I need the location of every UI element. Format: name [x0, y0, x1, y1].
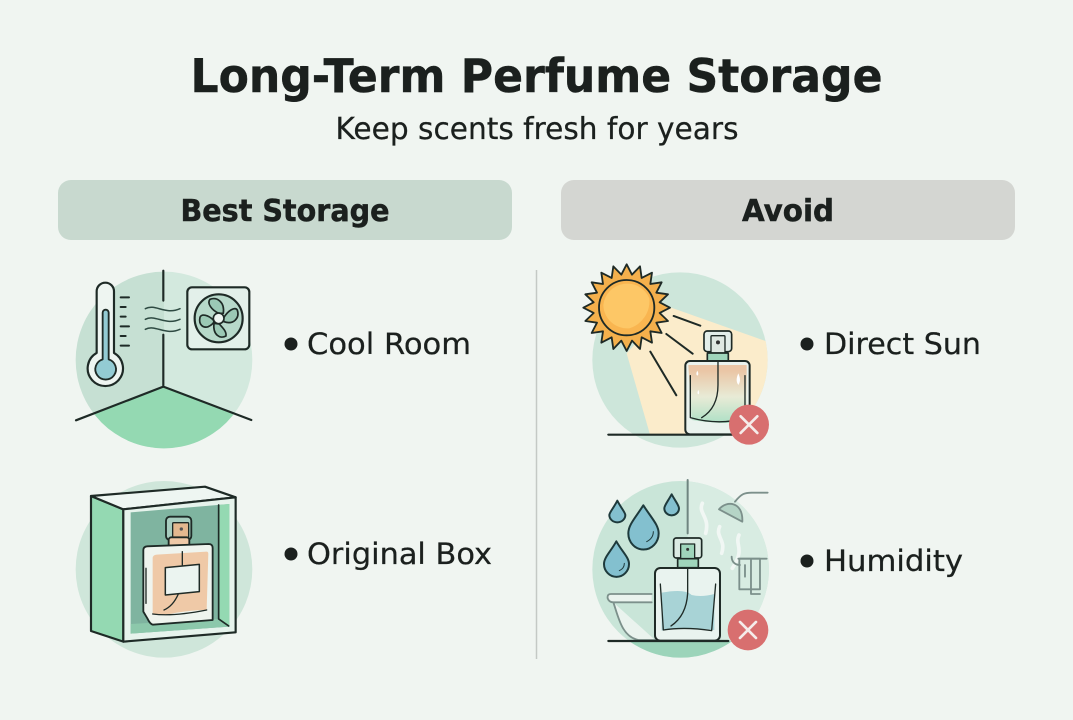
- icon: cool room: [74, 270, 252, 448]
- icon: humidity: [592, 479, 769, 658]
- icon: direct sun: [583, 264, 775, 448]
- icon: original box: [76, 481, 252, 658]
- label: direct sun: Direct Sun: [824, 327, 981, 361]
- panel header: avoid: Avoid: [742, 194, 834, 229]
- panel header: best storage: [58, 180, 512, 240]
- panel header: avoid: [561, 180, 1015, 240]
- label: original box: Original Box: [307, 537, 492, 571]
- panel header: best storage: Best Storage: [180, 194, 390, 229]
- label: humidity: Humidity: [824, 544, 963, 578]
- label: cool room: Cool Room: [307, 327, 471, 361]
- title: Long-Term Perfume Storage: [190, 49, 882, 103]
- subtitle: Keep scents fresh for years: [336, 112, 738, 147]
